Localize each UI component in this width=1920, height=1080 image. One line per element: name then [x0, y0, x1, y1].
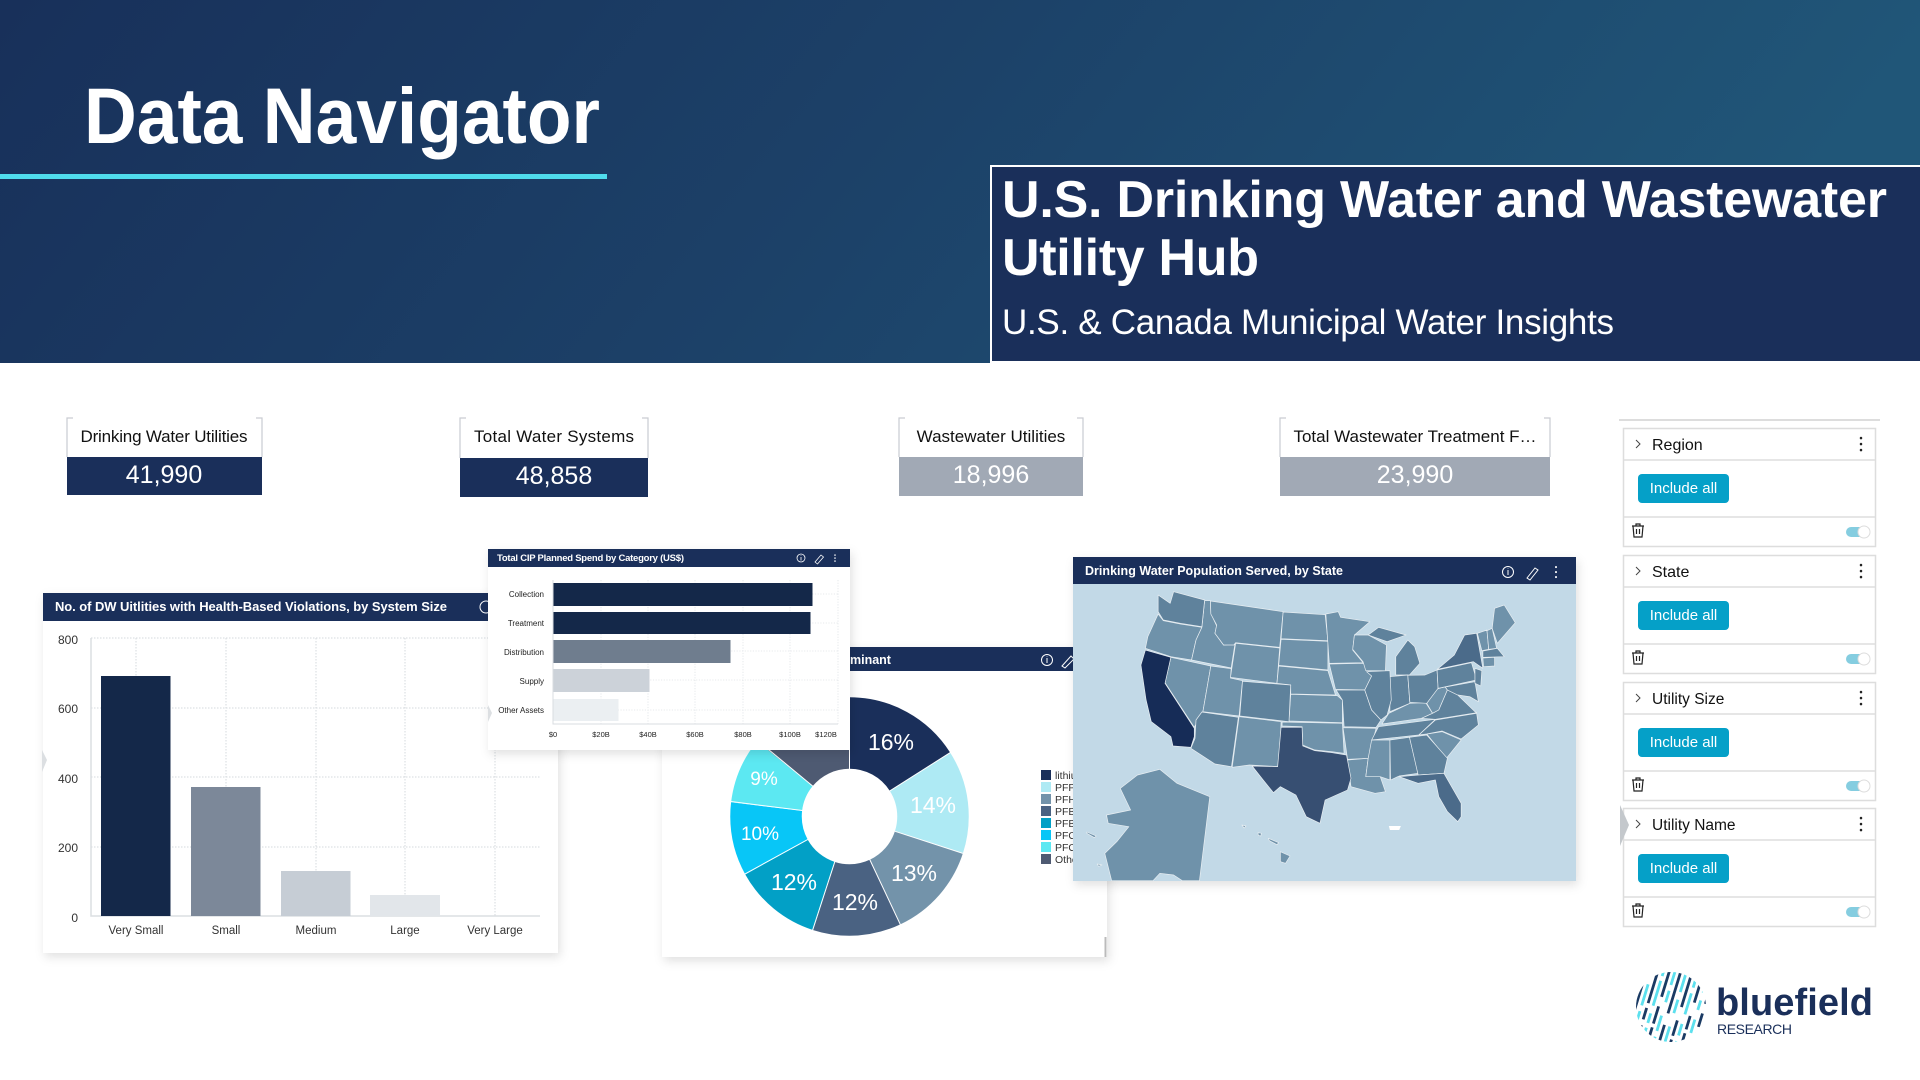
panel: contaminant donut chart [662, 647, 1107, 957]
x axis labels: $20B [592, 730, 610, 739]
y axis labels: 600 [58, 702, 78, 716]
KPI card: Drinking Water Utilities: 41,990 [126, 461, 202, 489]
KPI card: Wastewater Utilities: Wastewater Utilities [917, 427, 1065, 446]
panel header [43, 593, 558, 621]
filter: Utility Size: Include all [1650, 734, 1717, 751]
x axis labels: $0 [549, 730, 557, 739]
category labels: Distribution [504, 648, 544, 657]
donut legend: Other [1055, 854, 1082, 866]
filter: Region: Region [1652, 437, 1703, 454]
header banner [0, 0, 1920, 363]
filter panel [1619, 419, 1880, 926]
logo: bluefield research: RESEARCH [1717, 1021, 1792, 1037]
donut legend: PFHxA [1055, 794, 1088, 806]
KPI card: Total Water Systems [460, 418, 648, 497]
panel header: Drinking Water Population Served, by State [1085, 564, 1343, 578]
logo mark [1636, 972, 1706, 1042]
filter: Region: Include all [1650, 480, 1717, 497]
panel: violations bar chart [42, 593, 558, 953]
KPI card: Drinking Water Utilities [67, 418, 262, 495]
hub title box: U.S. & Canada Municipal Water Insights [1002, 303, 1614, 342]
y axis labels: 400 [58, 772, 78, 786]
logo: bluefield research: bluefield [1716, 982, 1873, 1024]
filter: Utility Size: Utility Size [1652, 691, 1724, 708]
y axis labels: 0 [71, 911, 78, 925]
filter: State: State [1652, 564, 1689, 581]
hub title box: U.S. Drinking Water and Wastewater [1002, 171, 1887, 229]
category labels: Collection [509, 590, 544, 599]
donut legend [1041, 770, 1088, 866]
donut percentage labels: 16% [868, 729, 914, 755]
filter: Utility Name [1624, 808, 1876, 926]
US state map [1087, 592, 1515, 881]
donut legend: PFOA [1055, 830, 1084, 842]
donut percentage labels [741, 729, 956, 915]
donut legend: PFPeA [1055, 782, 1088, 794]
donut legend: PFOS [1055, 842, 1084, 854]
panel header [488, 549, 850, 567]
category labels: Other Assets [498, 706, 544, 715]
x axis labels [549, 730, 837, 739]
donut percentage labels: 14% [910, 792, 956, 818]
KPI card: Total Wastewater Treatment: Total Wastewater Treatment F… [1293, 427, 1537, 446]
category labels: Treatment [508, 619, 545, 628]
panel: population map [1073, 557, 1576, 881]
x axis labels: Small [212, 925, 240, 937]
x axis labels: Very Small [109, 925, 163, 937]
panel: CIP planned spend bar chart [488, 549, 850, 750]
panel header: minant [850, 653, 892, 667]
donut percentage labels: 12% [832, 889, 878, 915]
filter: State [1624, 556, 1876, 674]
panel header: Total CIP Planned Spend by Category (US$) [497, 553, 684, 564]
filter: Utility Size [1624, 682, 1876, 800]
y axis labels: 200 [58, 841, 78, 855]
x axis labels: $120B [815, 730, 837, 739]
x axis labels [109, 925, 523, 937]
x axis labels: Large [390, 925, 420, 937]
donut slices [766, 733, 933, 900]
filter: State: Include all [1650, 607, 1717, 624]
KPI card: Total Wastewater Treatment: 23,990 [1377, 461, 1453, 489]
panel header: No. of DW Uitlities with Health-Based Violations, by System Size [55, 599, 447, 614]
KPI card: Wastewater Utilities [899, 418, 1083, 496]
title: Data Navigator: Data Navigator [84, 71, 600, 160]
KPI card: Total Water Systems: 48,858 [516, 462, 592, 490]
donut percentage labels: 12% [771, 869, 817, 895]
panel header [1073, 557, 1576, 584]
x axis labels: $80B [734, 730, 752, 739]
KPI card: Drinking Water Utilities: Drinking Water Utilities [80, 427, 248, 446]
x axis labels: Medium [296, 925, 336, 937]
logo: bluefield research [1636, 972, 1870, 1042]
category labels: Supply [520, 677, 544, 686]
x axis labels: Very Large [467, 925, 523, 937]
horizontal bars [554, 583, 812, 721]
filter: Region [1624, 428, 1876, 546]
title underline [0, 174, 607, 179]
filter: Utility Name: Include all [1650, 860, 1717, 877]
x axis labels: $100B [779, 730, 801, 739]
filter: Utility Name: Utility Name [1652, 817, 1736, 834]
donut legend: lithium [1055, 770, 1086, 782]
KPI card: Total Wastewater Treatment [1280, 418, 1550, 496]
hub title box: Utility Hub [1002, 229, 1259, 287]
x axis labels: $40B [639, 730, 657, 739]
donut percentage labels: 13% [891, 860, 937, 886]
donut percentage labels: 9% [750, 769, 778, 790]
donut percentage labels: 10% [741, 824, 779, 845]
category labels [498, 590, 545, 715]
panel header [662, 647, 1082, 671]
donut legend: PFBA [1055, 818, 1082, 830]
donut legend: PFBS [1055, 806, 1082, 818]
y axis labels: 800 [58, 633, 78, 647]
hub title box [991, 166, 1920, 362]
x axis labels: $60B [686, 730, 704, 739]
KPI card: Wastewater Utilities: 18,996 [953, 461, 1029, 489]
KPI card: Total Water Systems: Total Water Systems [474, 427, 634, 446]
bars [101, 676, 440, 916]
y axis labels [58, 633, 78, 925]
